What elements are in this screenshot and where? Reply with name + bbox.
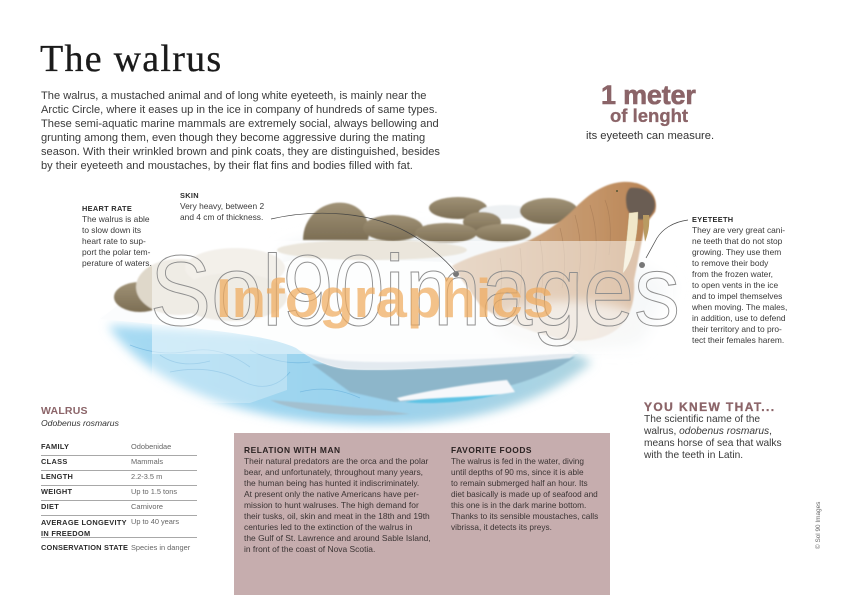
relation with man: the Gulf of St. Lawrence and around Sable Island,: [244, 533, 431, 543]
species data table: IN FREEDOM: [41, 529, 90, 538]
large walrus: [452, 182, 656, 349]
annotation: heart rate: to slow down its: [82, 225, 141, 235]
you knew that: The scientific name of the: [644, 414, 760, 425]
annotation: heart rate: The walrus is able: [82, 214, 150, 224]
species data table: Up to 40 years: [131, 517, 179, 526]
relation with man: in front of the coast of Nova Scotia.: [244, 544, 375, 554]
stat callout: 1 meter of lenght: [586, 80, 714, 142]
you knew that: [644, 400, 782, 461]
species data table: FAMILY: [41, 442, 69, 451]
species data table: Up to 1.5 tons: [131, 487, 177, 496]
species data table: Species in danger: [131, 543, 190, 552]
species data table: [41, 442, 197, 552]
annotation: eyeteeth: when moving. The males,: [692, 302, 787, 312]
annotation: eyeteeth: ne teeth that do not stop: [692, 236, 782, 246]
annotation: eyeteeth: to open vents in the ice: [692, 280, 778, 290]
annotation: eyeteeth: EYETEETH: [692, 215, 733, 224]
relation with man: bear, and unfortunately, throughout many years,: [244, 467, 423, 477]
intro text: by their eyeteeth and moustaches, by their flat fins and bodies filled with fat.: [41, 160, 413, 172]
species data table: 2.2-3.5 m: [131, 472, 162, 481]
you knew that: YOU KNEW THAT...: [644, 400, 776, 414]
intro text: These semi-aquatic marine mammals are extremely social, always bellowing and: [41, 118, 439, 130]
relation with man: RELATION WITH MAN: [244, 445, 341, 455]
title: The walrus: [40, 38, 222, 80]
relation with man: [244, 445, 431, 554]
relation with man: Their natural predators are the orca and the polar: [244, 456, 428, 466]
annotation: eyeteeth: [692, 215, 787, 345]
species data table: Mammals: [131, 457, 163, 466]
callout dot: eyeteeth: [639, 262, 645, 268]
species data table: DIET: [41, 502, 59, 511]
relation with man: their tusks, oil, skin and meat in the 18th and 19th: [244, 511, 430, 521]
annotation: eyeteeth: to remove their body: [692, 258, 768, 268]
species data table: LENGTH: [41, 472, 73, 481]
favorite foods: Thanks to its sensible moustaches, calls: [451, 512, 598, 521]
distant walrus backs: [303, 197, 578, 243]
annotation: eyeteeth: and to impel themselves: [692, 291, 782, 301]
relation with man: centuries led to the extinction of the walrus in: [244, 522, 412, 532]
annotation: eyeteeth: in addition, use to defend: [692, 313, 786, 323]
callout line: skin: [271, 213, 456, 273]
annotation: skin: [180, 191, 264, 222]
annotation: eyeteeth: tect their females harem.: [692, 335, 784, 345]
you knew that: with the teeth in Latin.: [644, 450, 743, 461]
annotation: eyeteeth: growing. They use them: [692, 247, 781, 257]
annotation: eyeteeth: from the frozen water,: [692, 269, 773, 279]
favorite foods: [451, 445, 598, 532]
relation with man: mission to hunt walruses. The high demand for: [244, 500, 419, 510]
callout dot: skin: [453, 271, 459, 277]
annotation: eyeteeth: their territory and to pro-: [692, 324, 782, 334]
favorite foods: FAVORITE FOODS: [451, 445, 532, 455]
favorite foods: diet basically is made up of seafood and: [451, 490, 598, 499]
favorite foods: vibrissa, it detects its preys.: [451, 523, 552, 532]
species heading: WALRUS: [41, 405, 88, 417]
credit: © Sol 90 Images: [815, 502, 822, 549]
watermark: Infographics: Infographics: [216, 267, 554, 329]
intro text: season. With their wrinkled brown and pink coats, they are distinguished, besides: [41, 146, 440, 158]
annotation: eyeteeth: They are very great cani-: [692, 225, 785, 235]
watermark: Sol90images: Sol90images: [150, 235, 680, 347]
you knew that: means horse of sea that walks: [644, 438, 782, 449]
ice floe: [100, 258, 579, 401]
annotation: heart rate: [82, 204, 152, 268]
translucent watermark panel: [152, 241, 673, 403]
annotation: skin: Very heavy, between 2: [180, 201, 264, 211]
intro text: The walrus, a mustached animal and of long white eyeteeth, is mainly near the: [41, 90, 426, 102]
annotation: heart rate: HEART RATE: [82, 204, 132, 213]
resting walruses, pale left group: [114, 240, 467, 321]
annotation: heart rate: heart rate to sup-: [82, 236, 146, 246]
snow ground behind animals: [280, 230, 672, 350]
species heading: Odobenus rosmarus: [41, 418, 119, 428]
favorite foods: to remain submerged half an hour. Its: [451, 479, 588, 488]
species heading: [41, 405, 119, 428]
species data table: AVERAGE LONGEVITY: [41, 518, 127, 527]
water: [108, 325, 592, 425]
species data table: CONSERVATION STATE: [41, 543, 128, 552]
favorite foods: until depths of 90 ms, since it is able: [451, 468, 584, 477]
species data table: Carnivore: [131, 502, 163, 511]
annotation: skin: SKIN: [180, 191, 199, 200]
intro text: Arctic Circle, where it eases up in the ice in company of hundreds of same types.: [41, 104, 437, 116]
annotation: heart rate: perature of waters.: [82, 258, 152, 268]
panel: relation with man and favorite foods: [234, 433, 610, 595]
favorite foods: this one is in the dark marine bottom.: [451, 501, 586, 510]
relation with man: At present only the native Americans have per-: [244, 489, 419, 499]
favorite foods: The walrus is fed in the water, diving: [451, 457, 584, 466]
annotation: heart rate: port the polar tem-: [82, 247, 150, 257]
you knew that: walrus, odobenus rosmarus,: [644, 426, 772, 437]
species data table: Odobenidae: [131, 442, 171, 451]
stat callout: 1 meter of lenght: its eyeteeth can measure.: [586, 130, 714, 142]
stat callout: 1 meter of lenght: 1 meter: [601, 80, 696, 110]
species data table: CLASS: [41, 457, 68, 466]
stat callout: 1 meter of lenght: of lenght: [610, 105, 688, 126]
callout line: eyeteeth: [646, 220, 688, 258]
relation with man: the human being has hunted it indiscriminately.: [244, 478, 419, 488]
intro text: grunting among them, even though they become aggressive during the mating: [41, 132, 425, 144]
species data table: WEIGHT: [41, 487, 72, 496]
annotation: skin: and 4 cm of thickness.: [180, 212, 263, 222]
intro text: [41, 90, 440, 172]
